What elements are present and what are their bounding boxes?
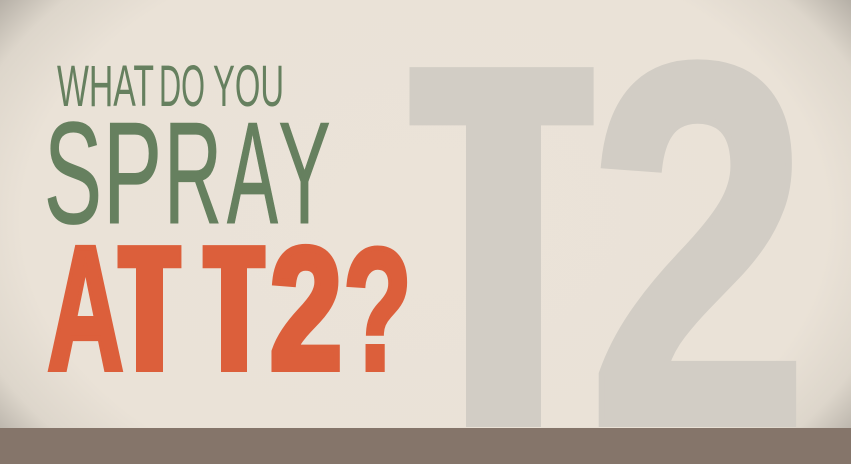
heading: spray: Y xyxy=(278,92,330,254)
heading: at T2?: A xyxy=(48,211,124,407)
heading: spray xyxy=(44,92,330,254)
heading: what do you: DO xyxy=(159,54,205,119)
heading: at T2?: 2 xyxy=(270,213,342,405)
heading: spray: S xyxy=(44,92,102,254)
heading: at T2? xyxy=(48,208,412,410)
heading: at T2?: ? xyxy=(343,212,412,406)
heading: at T2?: T xyxy=(202,208,266,410)
heading: spray: A xyxy=(227,92,278,254)
heading: spray: P xyxy=(103,92,162,254)
ground band xyxy=(0,428,851,464)
heading: what do you: WHAT xyxy=(57,54,154,119)
heading: what do you: YOU xyxy=(213,54,284,119)
heading: at T2?: T xyxy=(117,208,182,410)
heading: spray: R xyxy=(164,92,222,254)
